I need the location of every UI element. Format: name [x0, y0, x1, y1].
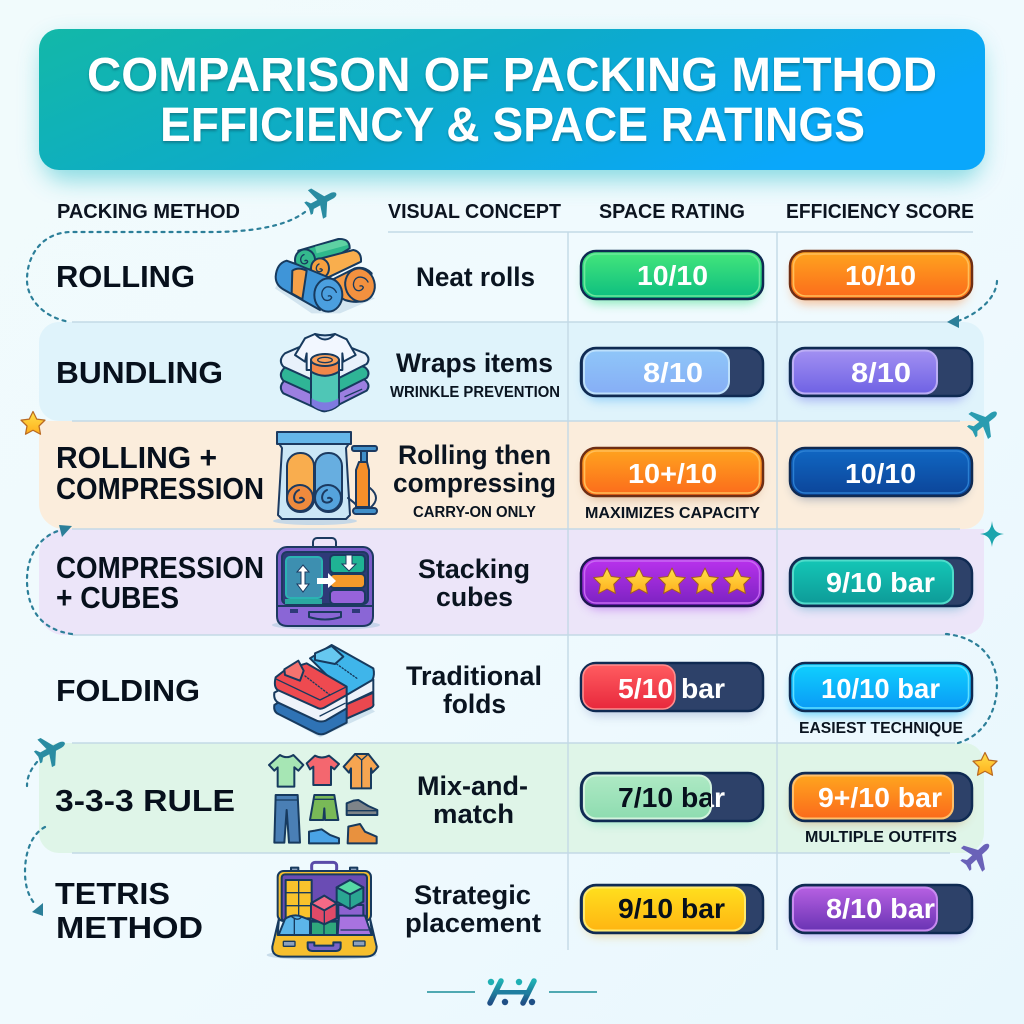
efficiency bar: bundling 8/10 [790, 348, 972, 401]
column headers: PACKING METHOD [57, 201, 240, 223]
efficiency bar: 3-3-3 rule 9+/10 bar [790, 773, 972, 824]
method labels: ROLLING [56, 259, 195, 294]
icon: sparkle [980, 521, 1004, 547]
method labels: TETRIS [55, 876, 170, 911]
method labels: 3-3-3 RULE [55, 783, 235, 818]
title banner: COMPARISON OF PACKING METHOD [87, 49, 937, 102]
decoration: dashed route right 2 [946, 634, 997, 743]
icon: tetris suitcase [267, 862, 377, 960]
caption: multiple outfits: MULTIPLE OUTFITS [805, 829, 957, 846]
space bar: bundling 8/10: 8/10 [643, 357, 703, 388]
visual concept labels: compressing [393, 468, 556, 498]
space bar: rolling + compression 10+/10: 10+/10 [628, 458, 717, 489]
icon: bundled clothes [281, 334, 368, 411]
method labels: BUNDLING [56, 355, 223, 390]
visual concept labels: Wraps items [396, 348, 553, 378]
decoration: plane and dashes left [27, 729, 72, 786]
row band: compression + cubes [39, 529, 984, 635]
column headers: VISUAL CONCEPT [388, 201, 561, 223]
visual concept labels: CARRY-ON ONLY [413, 504, 537, 521]
method labels [55, 259, 264, 945]
space bar: folding 5/10 bar: 5/10 bar [618, 673, 725, 704]
efficiency bar: compression + cubes 9/10 bar: 9/10 bar [826, 567, 935, 598]
efficiency bar: folding 10/10 bar: 10/10 bar [821, 673, 940, 704]
title banner [39, 29, 985, 180]
icon: star right [973, 752, 997, 775]
title banner: EFFICIENCY & SPACE RATINGS [160, 101, 865, 154]
space bar: 3-3-3 rule 7/10 bar: 7/10 bar [618, 782, 725, 813]
efficiency bar: compression + cubes 9/10 bar [790, 558, 972, 609]
visual concept labels: cubes [436, 582, 513, 612]
method labels: COMPRESSION [56, 550, 264, 585]
decoration: dashed route left 2 [27, 525, 72, 634]
efficiency bar: rolling + compression 10/10: 10/10 [845, 458, 916, 489]
efficiency bar: rolling 10/10 [790, 251, 972, 304]
space rating: compression + cubes five stars [581, 558, 763, 609]
visual concept labels: Traditional [406, 661, 542, 691]
efficiency bar: rolling 10/10: 10/10 [845, 260, 916, 291]
space bar: tetris 9/10 bar [581, 885, 763, 936]
caption: maximizes capacity: MAXIMIZES CAPACITY [585, 505, 761, 522]
icon: rolled clothes [275, 239, 378, 313]
title banner: COMPARISON OF PACKING METHOD [87, 51, 937, 104]
space bar: tetris 9/10 bar: 9/10 bar [618, 893, 725, 924]
icon: star left [21, 412, 45, 434]
method labels: ROLLING + [56, 440, 217, 475]
icon: plane top [300, 179, 344, 223]
space bar: rolling 10/10: 10/10 [637, 260, 708, 291]
caption: easiest technique: EASIEST TECHNIQUE [799, 720, 963, 737]
decoration: dashed route left 3 [25, 827, 45, 916]
space bar: folding 5/10 bar [581, 663, 763, 716]
method labels: METHOD [56, 910, 203, 945]
visual concept labels [390, 262, 560, 938]
visual concept labels: Rolling then [398, 440, 551, 470]
icon: 3-3-3 clothes grid [269, 754, 378, 843]
table grid [72, 232, 973, 950]
title banner: EFFICIENCY & SPACE RATINGS [160, 99, 865, 152]
row band: rolling + compression [39, 421, 984, 529]
space bar: bundling 8/10 [581, 348, 763, 401]
efficiency bar: 3-3-3 rule 9+/10 bar: 9+/10 bar [818, 782, 942, 813]
method labels: + CUBES [56, 580, 179, 615]
icon: plane right [962, 400, 1006, 444]
visual concept labels: Strategic [414, 880, 531, 910]
visual concept labels: placement [405, 908, 541, 938]
visual concept labels: match [433, 799, 514, 829]
decoration: dashed route top left [27, 212, 305, 322]
column headers: EFFICIENCY SCORE [786, 201, 974, 223]
visual concept labels: Stacking [418, 554, 530, 584]
row band: 3-3-3 rule [39, 743, 984, 853]
visual concept labels: folds [443, 689, 506, 719]
efficiency bar: tetris 8/10 bar: 8/10 bar [826, 893, 935, 924]
icon: plane purple [954, 833, 999, 878]
logo [427, 979, 597, 1005]
efficiency bar: bundling 8/10: 8/10 [851, 357, 911, 388]
visual concept labels: Mix-and- [417, 771, 528, 801]
efficiency bar: rolling + compression 10/10 [790, 448, 972, 499]
visual concept labels: Neat rolls [416, 262, 535, 292]
decoration: dashed route right 1 [947, 281, 997, 328]
icon: folded clothes stack [273, 645, 375, 737]
icon: compression bag with pump [273, 432, 377, 525]
column headers [57, 201, 974, 223]
space bar: rolling + compression 10+/10 [581, 448, 763, 499]
method labels: COMPRESSION [56, 471, 264, 506]
visual concept labels: WRINKLE PREVENTION [390, 384, 560, 401]
method labels: FOLDING [56, 673, 200, 708]
efficiency bar: tetris 8/10 bar [790, 885, 972, 936]
efficiency bar: folding 10/10 bar [790, 663, 972, 716]
row band: bundling [39, 322, 984, 421]
column headers: SPACE RATING [599, 201, 745, 223]
space bar: rolling 10/10 [581, 251, 763, 304]
space bar: 3-3-3 rule 7/10 bar [581, 773, 763, 824]
space bar: 3-3-3 rule 7/10 bar: 7/10 bar [618, 782, 725, 813]
icon: suitcase with cubes [272, 538, 380, 630]
